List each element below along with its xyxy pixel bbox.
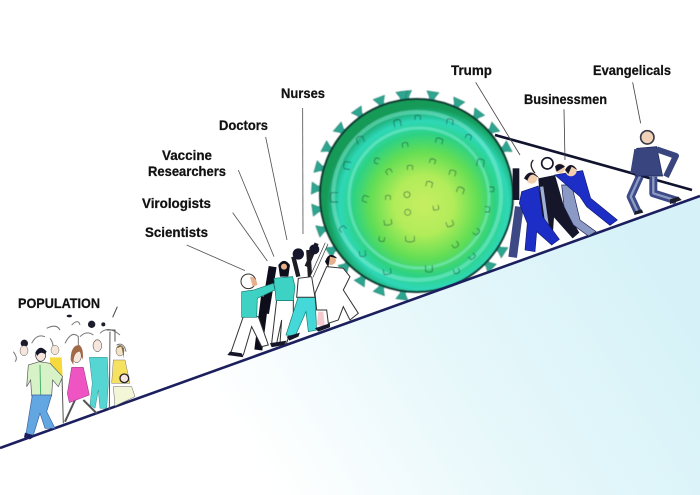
figure: blue man front left	[519, 172, 559, 252]
virus body	[320, 99, 513, 292]
leader lines	[476, 82, 641, 160]
figure: evangelical leader	[631, 131, 682, 215]
pencil tick	[113, 307, 117, 317]
group: population crowd	[13, 307, 135, 439]
background head marks	[21, 315, 105, 347]
figure: woman, back left	[20, 346, 28, 356]
slope line	[0, 196, 700, 448]
label: vaccine researchers: Vaccine	[162, 147, 212, 163]
virus sphere	[311, 90, 513, 300]
figure: bearded man in turquoise	[270, 261, 295, 347]
lever pole	[495, 135, 692, 190]
figure: man in turquoise with pole	[89, 330, 115, 410]
leader lines	[187, 108, 303, 271]
figure: yellow woman with child	[112, 345, 135, 406]
label: evangelicals: Evangelicals	[593, 62, 671, 78]
label: virologists: Virologists	[142, 195, 211, 211]
label: businessmen: Businessmen	[524, 91, 607, 107]
figure: yellow shirt person	[50, 345, 63, 423]
virus surface markings	[330, 115, 494, 275]
background tint below the slope	[0, 196, 700, 495]
group: pushers on the left	[187, 108, 358, 357]
background crowd sketches	[13, 322, 126, 362]
group: businessmen pushing back	[476, 82, 682, 257]
label: population: POPULATION	[18, 295, 100, 311]
figure: grey-trousered man	[555, 163, 596, 236]
virus spikes	[311, 90, 512, 300]
label: trump: Trump	[451, 62, 492, 78]
figure: dark figure behind	[258, 267, 273, 350]
figure: nurse in white and turquoise legs	[286, 243, 319, 341]
figure: blue man, right	[555, 165, 617, 225]
figure: scientist	[227, 274, 275, 357]
label: vaccine researchers: Researchers	[148, 163, 226, 179]
figure: woman in pink dress	[65, 345, 97, 422]
label: doctors: Doctors	[219, 117, 268, 133]
figure: person in white pressing virus	[312, 243, 358, 332]
label: scientists: Scientists	[145, 224, 208, 240]
virus crayon rings	[333, 112, 501, 280]
figure: man in pale green shirt and jeans	[24, 348, 63, 439]
figure: dark suited man	[531, 158, 579, 238]
figure: back pale man	[513, 168, 519, 257]
label: nurses: Nurses	[281, 85, 325, 101]
